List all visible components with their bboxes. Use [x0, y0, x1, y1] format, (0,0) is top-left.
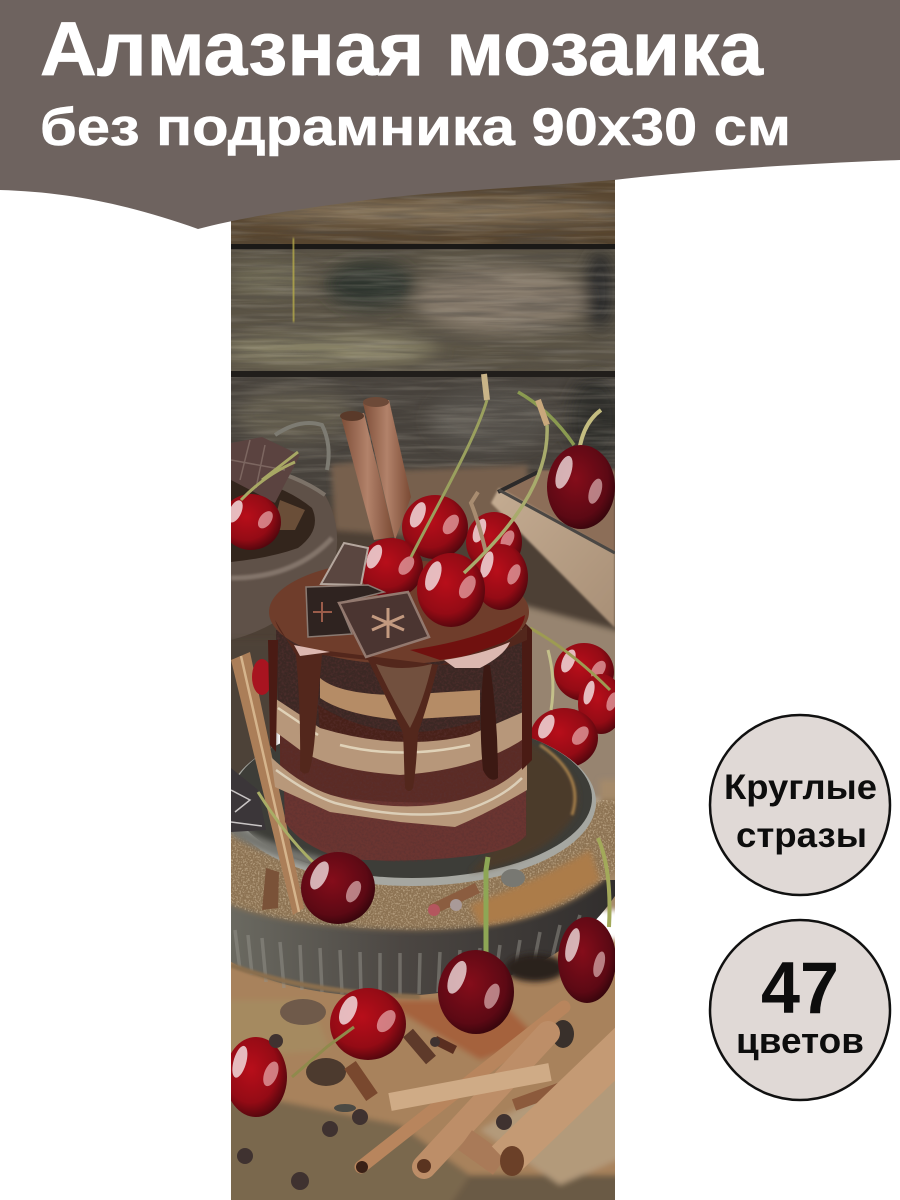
side glaze [268, 620, 532, 770]
badge: round rhinestones [710, 715, 890, 895]
badge: 47 colours: цветов [736, 1020, 864, 1061]
title line 2: без подрамника 90х30 см [40, 98, 791, 157]
top sponge [276, 630, 522, 732]
burlap cloth and background table [231, 459, 615, 802]
badge: round rhinestones: стразы [736, 816, 867, 855]
plate-side cherry and stem [258, 792, 375, 924]
bowl with chocolate [231, 423, 337, 640]
cherry centre bottom [292, 988, 406, 1077]
header banner [0, 0, 900, 229]
layered cake [268, 620, 532, 862]
cherry right lower [558, 838, 616, 1003]
cherry cluster with stems [359, 374, 547, 627]
cherry top right [518, 392, 615, 529]
long cinnamon stick on the left [231, 652, 304, 915]
title line 1: Алмазная мозаика [40, 7, 764, 92]
bottom sponge [284, 790, 526, 861]
left speckled background [231, 706, 280, 774]
small cinnamon stick [262, 868, 279, 910]
wooden plank backdrop [231, 180, 615, 514]
cherry with tall stem centre [438, 857, 514, 1034]
badge: round rhinestones: Круглые [724, 768, 877, 807]
middle sponge [280, 735, 526, 802]
cream layer bottom [271, 757, 527, 827]
cherries middle right [530, 626, 615, 766]
plank wood grain [231, 185, 615, 430]
table with cocoa powder [231, 780, 615, 1200]
dark chocolate under left [231, 768, 266, 832]
cocoa beans [280, 999, 574, 1112]
badge: 47 colours: 47 [761, 948, 839, 1029]
badge: 47 colours [710, 920, 890, 1100]
round ribbed tray [231, 798, 615, 1000]
thin yellow stem on plank [293, 238, 294, 322]
peppercorns [237, 1034, 512, 1190]
dark plate [231, 738, 596, 886]
chocolate glaze and drips [269, 560, 529, 791]
cherry bottom left [225, 1037, 287, 1117]
short stick and peppercorns on tray [428, 869, 525, 916]
cinnamon sticks on table [350, 1007, 640, 1176]
cream layer middle [273, 697, 528, 775]
chocolate pieces with star anise [306, 543, 429, 657]
wooden box on the right [491, 470, 615, 628]
photo: chocolate cherry cake [231, 180, 615, 1200]
sponge crumb texture [276, 630, 527, 862]
small red cherry behind cake [252, 659, 269, 695]
cream layer top [320, 678, 480, 720]
cinnamon sticks on top [340, 397, 411, 540]
cherry in bowl [231, 451, 299, 550]
